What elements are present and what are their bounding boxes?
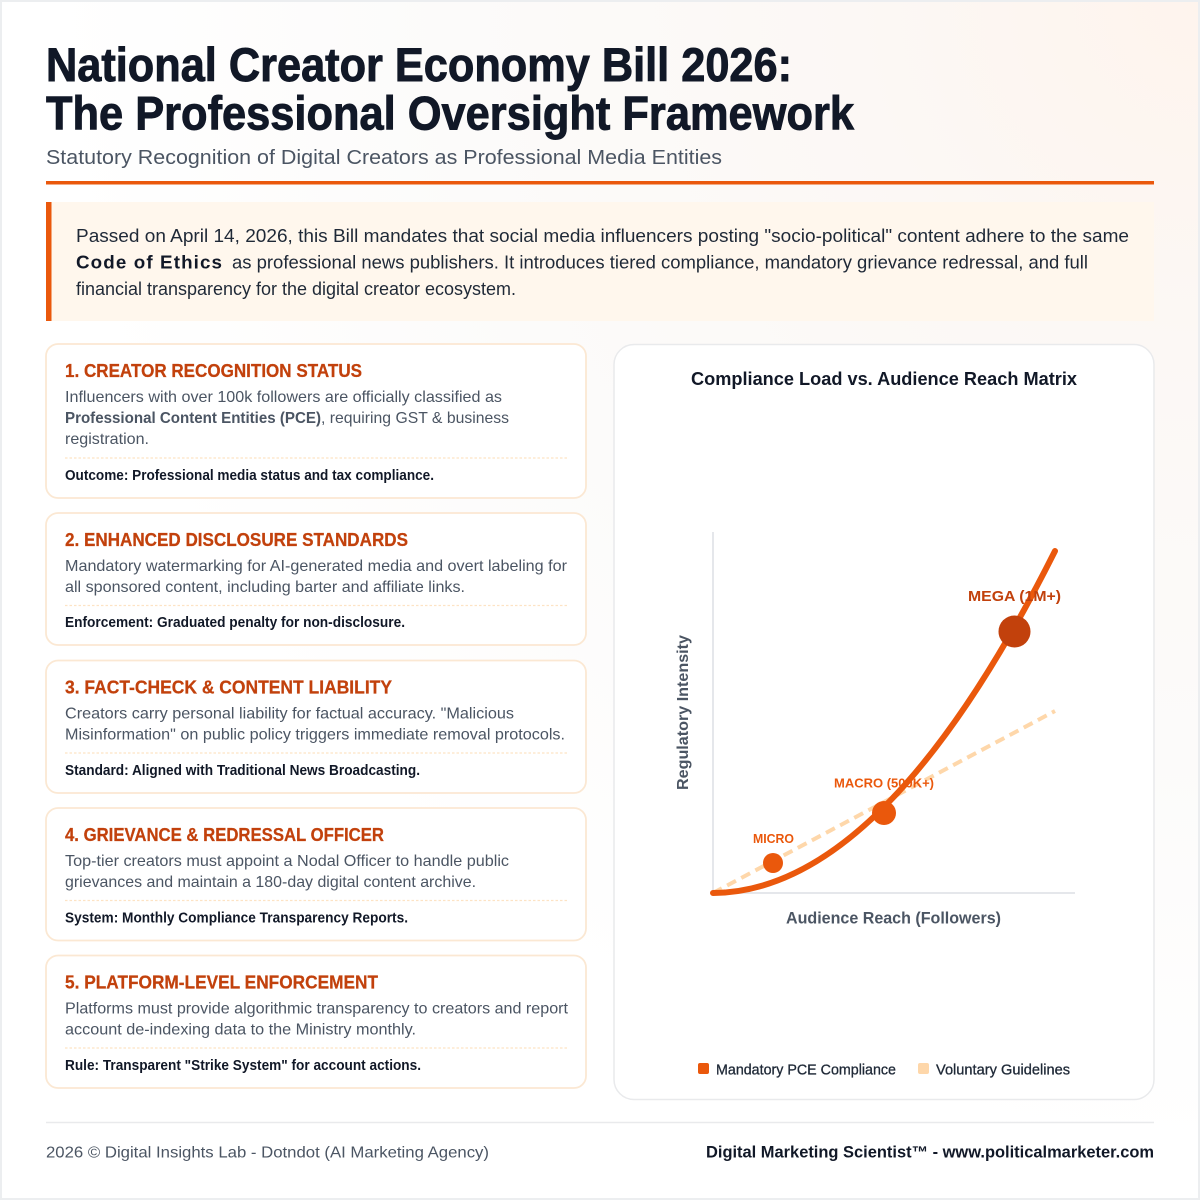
title: The Professional Oversight Framework: [46, 86, 855, 140]
text: card 4 body: [65, 853, 509, 891]
chart title: Compliance Load vs. Audience Reach Matrix: [691, 368, 1078, 389]
callout: bill summary: as professional news publishers. It introduces tiered compliance, mandatory grievance redressal, and full: [232, 252, 1088, 272]
legend: Mandatory PCE Compliance: [716, 1062, 896, 1078]
heading: card 4: 4. GRIEVANCE & REDRESSAL OFFICER: [65, 825, 384, 845]
heading: card 3: 3. FACT-CHECK & CONTENT LIABILITY: [65, 678, 392, 698]
callout: bill summary: [46, 202, 1154, 321]
text: card 4 system: System: Monthly Compliance Transparency Reports.: [65, 910, 408, 926]
panel: card 5 platform-level enforcement: [46, 956, 586, 1088]
header rule: [46, 181, 1154, 184]
callout: bill summary: Code of Ethics: [76, 252, 222, 272]
text: card 3 body: Creators carry personal liability for factual accuracy. "Malicious: [65, 706, 514, 722]
chart: compliance curve: [675, 532, 1075, 928]
point: micro: [763, 853, 783, 873]
heading: card 1: 1. CREATOR RECOGNITION STATUS: [65, 361, 362, 381]
title: [46, 38, 855, 140]
footer: brand: Digital Marketing Scientist™ - www.politicalmarketer.com: [706, 1144, 1154, 1162]
text: card 3 standard: Standard: Aligned with Traditional News Broadcasting.: [65, 763, 420, 779]
text: card 5 body: account de-indexing data to the Ministry monthly.: [65, 1022, 416, 1038]
text: card 3 body: Misinformation" on public policy triggers immediate removal protocols.: [65, 726, 565, 744]
panel: card 3 fact-check and content liability: [46, 660, 586, 793]
legend: Voluntary Guidelines: [936, 1062, 1070, 1078]
text: card 1 body: Professional Content Entities (PCE): [65, 410, 321, 427]
text: card 1 body: [65, 389, 509, 448]
point: macro: [872, 801, 896, 825]
line: mandatory PCE compliance: [713, 551, 1055, 893]
text: card 1 body: , requiring GST & business: [321, 410, 509, 427]
callout: bill summary: financial transparency for the digital creator ecosystem.: [76, 278, 516, 299]
callout: bill summary: Passed on April 14, 2026, this Bill mandates that social media influencers posting "socio-political" content adhere to the same: [76, 225, 1129, 246]
text: card 4 body: Top-tier creators must appoint a Nodal Officer to handle public: [65, 853, 509, 870]
footer: [46, 1122, 1154, 1162]
axis label: y: Regulatory Intensity: [675, 635, 692, 790]
text: card 1 outcome: Outcome: Professional media status and tax compliance.: [65, 468, 434, 484]
subtitle: Statutory Recognition of Digital Creators as Professional Media Entities: [46, 146, 722, 169]
panel: compliance chart: [614, 344, 1154, 1100]
text: card 5 body: [65, 1000, 569, 1038]
text: card 2 body: all sponsored content, including barter and affiliate links.: [65, 579, 465, 596]
panel: card 1 creator recognition status: [46, 344, 586, 498]
text: card 2 body: [65, 558, 568, 596]
text: card 4 body: grievances and maintain a 180-day digital content archive.: [65, 874, 476, 891]
text: card 1 body: registration.: [65, 431, 149, 448]
panel: card 2 enhanced disclosure standards: [46, 513, 586, 645]
footer: credit: 2026 © Digital Insights Lab - Dotndot (AI Marketing Agency): [46, 1144, 489, 1162]
axis label: x: Audience Reach (Followers): [786, 910, 1001, 928]
text: card 5 body: Platforms must provide algorithmic transparency to creators and report: [65, 1000, 569, 1018]
title: National Creator Economy Bill 2026:: [46, 38, 792, 91]
heading: card 2: 2. ENHANCED DISCLOSURE STANDARDS: [65, 530, 408, 550]
text: card 2 body: Mandatory watermarking for AI-generated media and overt labeling for: [65, 558, 568, 575]
line: voluntary guidelines: [713, 711, 1055, 893]
text: card 1 body: Influencers with over 100k followers are officially classified as: [65, 389, 502, 406]
label: macro: MACRO (500K+): [834, 776, 934, 790]
label: micro: MICRO: [753, 832, 794, 846]
label: mega: MEGA (1M+): [968, 588, 1061, 605]
text: card 2 enforcement: Enforcement: Graduated penalty for non-disclosure.: [65, 615, 405, 631]
legend: [698, 1062, 1070, 1078]
panel: card 4 grievance and redressal officer: [46, 808, 586, 940]
text: card 3 body: [65, 706, 565, 744]
text: card 5 rule: Rule: Transparent "Strike System" for account actions.: [65, 1058, 421, 1074]
point: mega: [998, 616, 1030, 648]
heading: card 5: 5. PLATFORM-LEVEL ENFORCEMENT: [65, 972, 378, 992]
